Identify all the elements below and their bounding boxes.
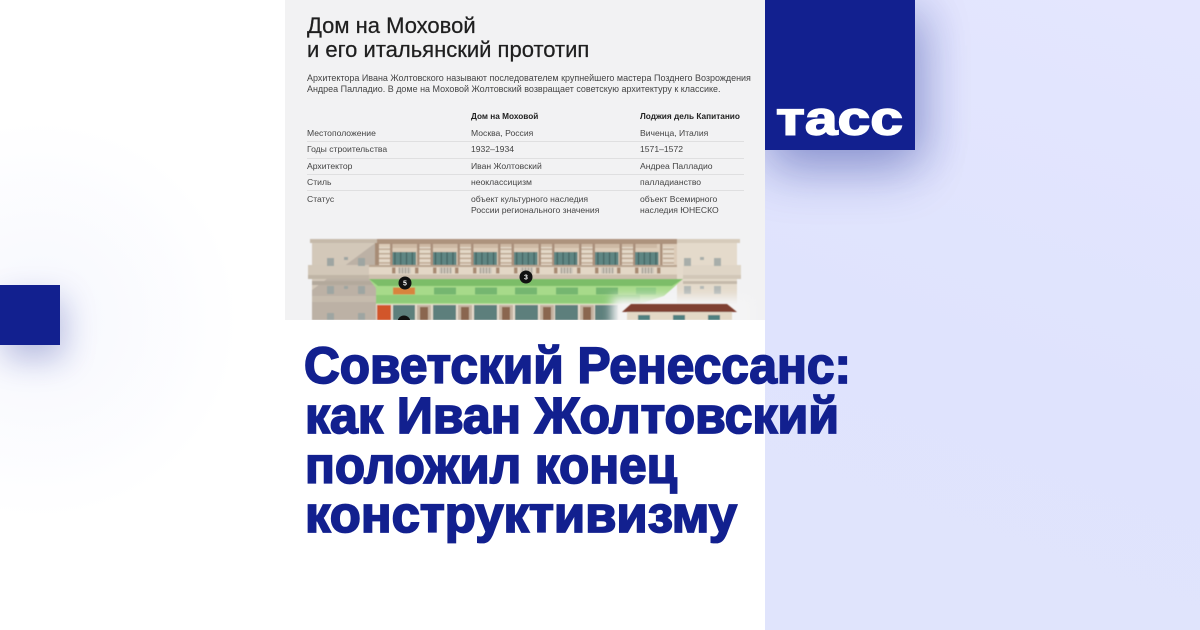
comparison table xyxy=(307,112,744,215)
comparison table: неоклассицизм xyxy=(471,177,532,187)
comparison table: Дом на Моховой xyxy=(471,112,538,121)
marker 3: 3 xyxy=(524,274,528,282)
background: right lavender panel xyxy=(765,0,1200,630)
comparison table: палладианство xyxy=(640,177,701,187)
headline: конструктивизму xyxy=(305,486,738,543)
heading: infographic title xyxy=(307,13,589,62)
heading: infographic title: и его итальянский прототип xyxy=(307,36,589,62)
right wing xyxy=(677,239,741,304)
loggia del Capitanio xyxy=(622,304,737,320)
headline: Советский Ренессанс: xyxy=(304,337,851,394)
comparison table: наследия ЮНЕСКО xyxy=(640,205,719,215)
comparison table: Статус xyxy=(307,194,334,204)
comparison table: России регионального значения xyxy=(471,205,599,215)
marker 5: 5 xyxy=(403,280,407,288)
comparison table: объект Всемирного xyxy=(640,194,717,204)
comparison table: Архитектор xyxy=(307,161,352,171)
green highlighted frieze xyxy=(369,279,683,304)
comparison table: Годы строительства xyxy=(307,144,387,154)
comparison table: Лоджия дель Капитанио xyxy=(640,112,740,121)
comparison table: 1571–1572 xyxy=(640,144,683,154)
lower floor with capitals xyxy=(376,303,622,320)
decorative square left xyxy=(0,285,60,345)
left wing xyxy=(308,239,378,320)
headline: положил конец xyxy=(305,437,677,494)
marker 5 xyxy=(398,276,412,290)
illustration: building facades xyxy=(308,238,742,320)
marker partially hidden xyxy=(398,316,410,328)
comparison table: Стиль xyxy=(307,177,331,187)
comparison table: 1932–1934 xyxy=(471,144,514,154)
text block: lead paragraph: Архитектора Ивана Жолтовского называют последователем крупнейшего мастера Позднего Возрождения xyxy=(307,73,751,83)
white panel behind headline xyxy=(285,320,765,630)
central facade upper floor xyxy=(375,239,677,267)
logo shadow xyxy=(765,0,915,150)
white glow behind loggia xyxy=(612,297,752,337)
logo: TASS square xyxy=(765,0,915,150)
comparison table: Местоположение xyxy=(307,128,376,138)
text block: lead paragraph: Андреа Палладио. В доме на Моховой Жолтовский возвращает советскую архитектуру к классике. xyxy=(307,84,720,94)
central balcony xyxy=(369,265,683,279)
comparison table: Москва, Россия xyxy=(471,128,533,138)
comparison table: Виченца, Италия xyxy=(640,128,708,138)
text block: lead paragraph xyxy=(307,73,751,94)
heading: infographic title: Дом на Моховой xyxy=(307,13,476,38)
comparison table: Иван Жолтовский xyxy=(471,161,542,171)
comparison table: объект культурного наследия xyxy=(471,194,588,204)
panel: infographic preview xyxy=(285,0,765,320)
marker 3 xyxy=(520,270,532,284)
background: left soft glow xyxy=(0,60,300,560)
headline: как Иван Жолтовский xyxy=(305,387,839,444)
comparison table: Андреа Палладио xyxy=(640,161,713,171)
